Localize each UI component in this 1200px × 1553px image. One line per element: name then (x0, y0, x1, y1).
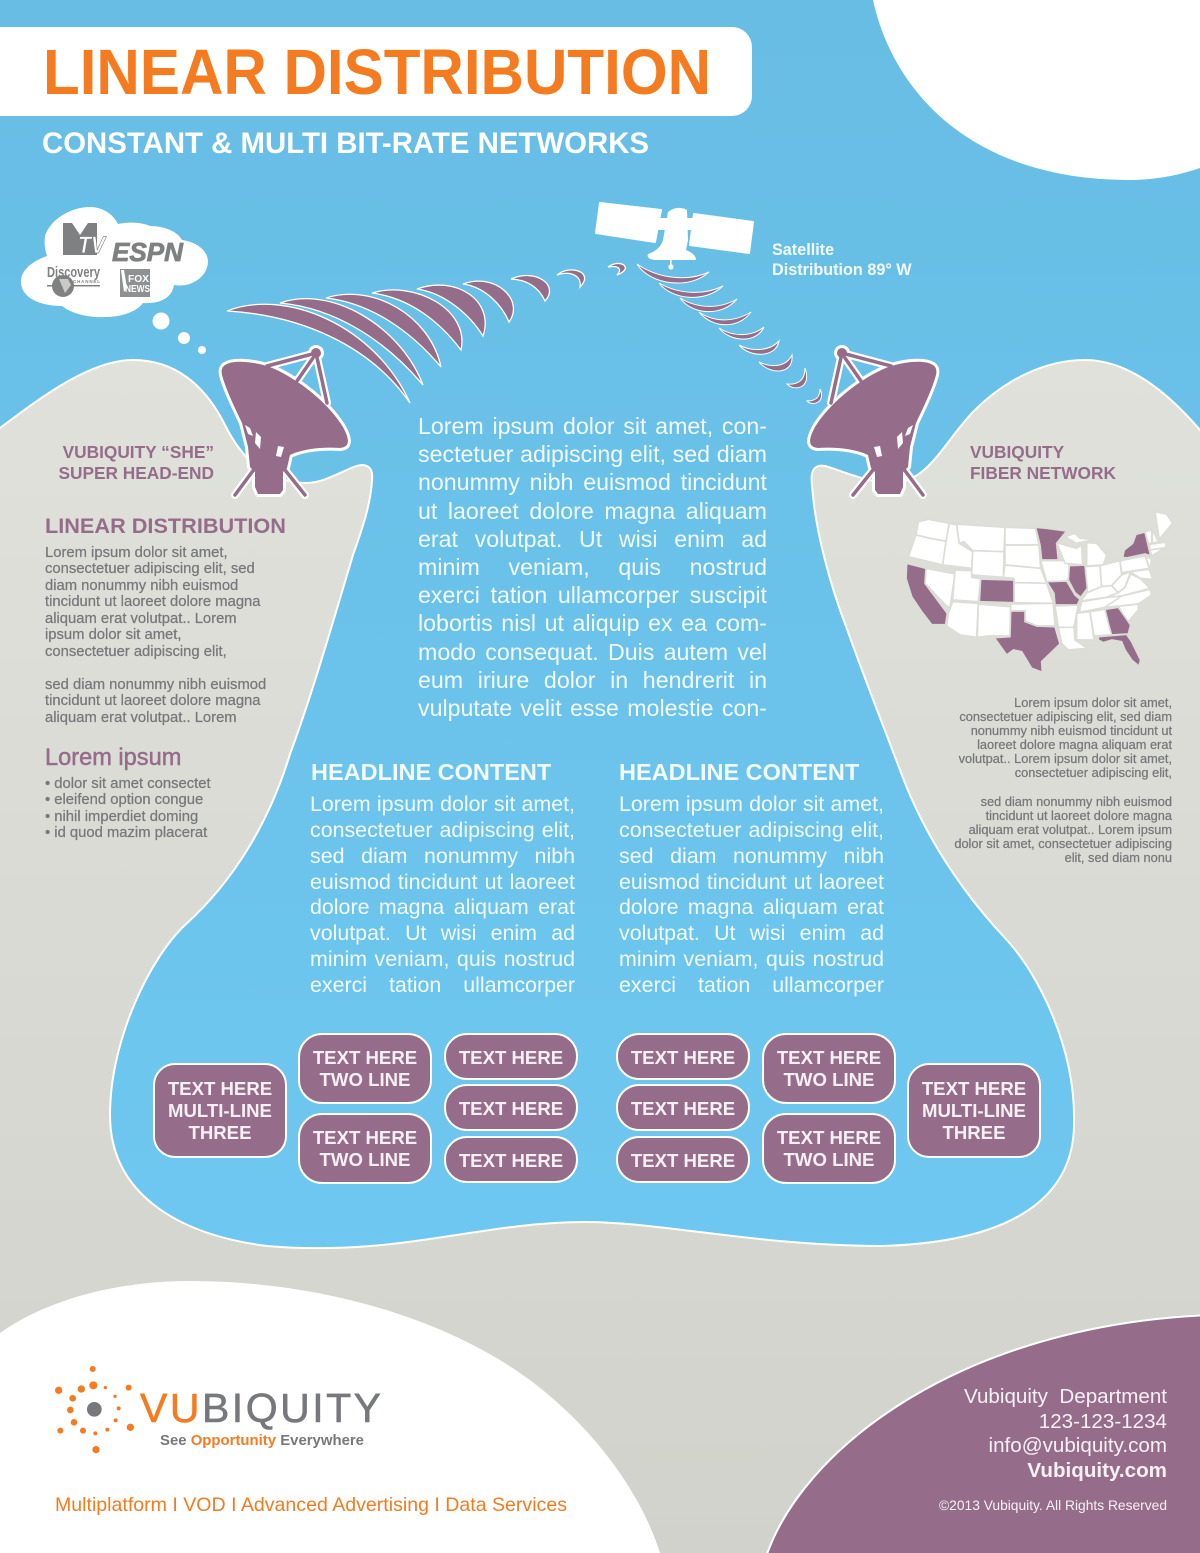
button: one line left 2: TEXT HERE (459, 1098, 563, 1118)
left column body text: aliquam erat volutpat.. Lorem (45, 611, 237, 627)
text block: column one: consectetuer adipiscing elit, (310, 818, 575, 842)
button: one line left 3: TEXT HERE (459, 1150, 563, 1170)
text block: column two: exerci tation ullamcorper (619, 973, 884, 997)
left column body text: tincidunt ut laoreet dolore magna (45, 693, 261, 709)
button: three line right (907, 1063, 1041, 1158)
label: Vubiquity fiber network: VUBIQUITY (970, 442, 1064, 462)
right column body text: nonummy nibh euismod tincidunt ut (971, 723, 1172, 738)
right column body text: elit, sed diam nonu (1065, 850, 1172, 865)
button: one line right 2 (616, 1084, 750, 1131)
left column bullet list (45, 776, 211, 841)
text block: column two: volutpat. Ut wisi enim ad (619, 921, 884, 945)
main paragraph: Lorem ipsum dolor sit amet, con- (418, 413, 767, 439)
button: two line upper right: TEXT HERE (777, 1046, 881, 1068)
button: one line left 1: TEXT HERE (459, 1046, 563, 1068)
button: two line upper right (762, 1033, 896, 1104)
button: one line right 3: TEXT HERE (631, 1150, 735, 1170)
label: satellite distribution (772, 241, 912, 279)
left column bullet list: • nihil imperdiet doming (45, 809, 198, 825)
button: one line left 3 (444, 1136, 578, 1183)
main paragraph: minim veniam, quis nostrud (418, 554, 767, 580)
main paragraph: vulputate velit esse molestie con- (418, 695, 767, 721)
logo: Discovery Channel: CHANNEL (73, 279, 100, 284)
button: two line lower right: TWO LINE (784, 1148, 874, 1170)
button: two line upper left: TWO LINE (320, 1068, 410, 1090)
footer: white logo area (0, 1281, 660, 1553)
corner shape: top right white (873, 0, 1200, 180)
signal arcs: dish up to satellite (227, 263, 625, 403)
logo: Discovery Channel (47, 264, 100, 297)
left column body text: tincidunt ut laoreet dolore magna (45, 594, 261, 610)
main paragraph (418, 413, 767, 721)
main paragraph: sectetuer adipiscing elit, sed diam (418, 441, 767, 467)
main paragraph: ut laoreet dolore magna aliquam (418, 498, 767, 524)
text block: column two: sed diam nonummy nibh (619, 844, 884, 868)
label: satellite distribution: Distribution 89° W (772, 261, 912, 279)
button: one line left 2 (444, 1084, 578, 1131)
right column body text: tincidunt ut laoreet dolore magna (986, 808, 1172, 823)
left column subheading: Lorem ipsum (45, 745, 181, 771)
text block: column one: minim veniam, quis nostrud (310, 947, 575, 971)
left column body text: aliquam erat volutpat.. Lorem (45, 710, 237, 726)
label: Vubiquity SHE: SUPER HEAD-END (58, 462, 214, 482)
logo: Fox News (120, 269, 150, 297)
button: two line upper left: TEXT HERE (313, 1046, 417, 1068)
main paragraph: exerci tation ullamcorper suscipit (418, 582, 767, 608)
text block: column two (619, 792, 884, 997)
button: two line lower left (298, 1113, 432, 1184)
button: two line lower right (762, 1113, 896, 1184)
left column bullet list: • eleifend option congue (45, 792, 203, 808)
button: two line lower left: TEXT HERE (313, 1126, 417, 1148)
headline: column one: HEADLINE CONTENT (311, 759, 551, 785)
right column body text: dolor sit amet, consectetuer adipiscing (954, 836, 1172, 851)
text block: column two: minim veniam, quis nostrud (619, 947, 884, 971)
text block: column one: exerci tation ullamcorper (310, 973, 575, 997)
icon: right satellite dish (810, 345, 936, 495)
left column body text: sed diam nonummy nibh euismod (45, 677, 266, 693)
logo: Vubiquity wordmark: VUBIQUITY (140, 1385, 381, 1431)
states not covered (908, 512, 1173, 650)
states covered (906, 527, 1151, 672)
text block: column two: consectetuer adipiscing elit, (619, 818, 884, 842)
label: Vubiquity SHE (58, 442, 214, 482)
label: Vubiquity fiber network: FIBER NETWORK (970, 462, 1116, 482)
button: three line right: THREE (942, 1122, 1006, 1142)
thought cloud with network logos (21, 207, 208, 354)
logo: MTV (63, 223, 107, 259)
text block: column one: Lorem ipsum dolor sit amet, (310, 792, 575, 816)
contact details (964, 1385, 1167, 1482)
button: two line lower right: TEXT HERE (777, 1126, 881, 1148)
text block: column two: euismod tincidunt ut laoreet (619, 870, 884, 894)
button: three line left: TEXT HERE (168, 1078, 272, 1098)
right column body text: laoreet dolore magna aliquam erat (977, 737, 1172, 752)
logo: Discovery Channel: Discovery (47, 264, 100, 281)
button: three line left (153, 1063, 287, 1158)
right column body text (954, 695, 1172, 865)
left column body text (45, 545, 266, 726)
logo: Fox News: FOX (128, 274, 149, 285)
contact details: info@vubiquity.com (988, 1434, 1167, 1457)
button: three line right: TEXT HERE (922, 1078, 1026, 1098)
left column body text: ipsum dolor sit amet, (45, 627, 182, 643)
right column body text: consectetuer adipiscing elit, (1015, 765, 1172, 780)
button: one line right 1: TEXT HERE (631, 1046, 735, 1068)
chart: US coverage map (906, 512, 1173, 672)
logo: MTV: TV (78, 232, 107, 259)
copyright: ©2013 Vubiquity. All Rights Reserved (939, 1498, 1167, 1513)
logo tagline: See Opportunity Everywhere (160, 1433, 364, 1449)
subtitle: CONSTANT & MULTI BIT-RATE NETWORKS (42, 127, 649, 160)
footer services line: Multiplatform I VOD I Advanced Advertising I Data Services (55, 1494, 567, 1516)
left column bullet list: • dolor sit amet consectet (45, 776, 211, 792)
contact details: Vubiquity.com (1027, 1459, 1167, 1482)
main paragraph: lobortis nisl ut aliquip ex ea com- (418, 610, 767, 636)
headline: column two: HEADLINE CONTENT (619, 759, 859, 785)
button: one line left 1 (444, 1033, 578, 1080)
label: Vubiquity SHE: VUBIQUITY “SHE” (63, 442, 214, 462)
left column body text: diam nonummy nibh euismod (45, 578, 238, 594)
text block: column one: dolore magna aliquam erat (310, 895, 575, 919)
text block: column one: euismod tincidunt ut laoreet (310, 870, 575, 894)
main paragraph: eum iriure dolor in hendrerit in (418, 667, 767, 693)
button: two line upper left (298, 1033, 432, 1104)
main paragraph: nonummy nibh euismod tincidunt (418, 469, 767, 495)
left column body text: consectetuer adipiscing elit, sed (45, 561, 255, 577)
label: satellite distribution: Satellite (772, 241, 834, 259)
contact details: 123-123-1234 (1039, 1410, 1167, 1433)
icon: satellite (596, 203, 753, 270)
button: three line right: MULTI-LINE (922, 1100, 1026, 1120)
button: three line left: MULTI-LINE (168, 1100, 272, 1120)
left column heading: LINEAR DISTRIBUTION (45, 513, 286, 538)
text block: column one: sed diam nonummy nibh (310, 844, 575, 868)
logo: Fox News: NEWS (125, 284, 150, 295)
text block: column one (310, 792, 575, 997)
right column body text: aliquam erat volutpat.. Lorem ipsum (969, 822, 1172, 837)
title banner: LINEAR DISTRIBUTION (43, 36, 711, 108)
left column body text: consectetuer adipiscing elit, (45, 644, 227, 660)
signal arcs: satellite down to dish (637, 264, 822, 404)
footer: purple contact area (765, 1315, 1200, 1553)
main paragraph: erat volutpat. Ut wisi enim ad (418, 526, 767, 552)
text block: column two: dolore magna aliquam erat (619, 895, 884, 919)
button: one line right 2: TEXT HERE (631, 1098, 735, 1118)
left column body text: Lorem ipsum dolor sit amet, (45, 545, 228, 561)
text block: column two: Lorem ipsum dolor sit amet, (619, 792, 884, 816)
text block: column one: volutpat. Ut wisi enim ad (310, 921, 575, 945)
contact details: Vubiquity Department (964, 1385, 1167, 1408)
grey landscape surrounding the blue content area (0, 360, 1200, 1553)
button: two line lower left: TWO LINE (320, 1148, 410, 1170)
icon: left satellite dish (222, 345, 348, 495)
right column body text: sed diam nonummy nibh euismod (981, 794, 1172, 809)
logo: ESPN: ESPN (112, 237, 184, 267)
button: one line right 1 (616, 1033, 750, 1080)
button: three line left: THREE (188, 1122, 252, 1142)
right column body text: consectetuer adipiscing elit, sed diam (959, 709, 1172, 724)
button: one line right 3 (616, 1136, 750, 1183)
right column body text: volutpat.. Lorem ipsum dolor sit amet, (959, 751, 1172, 766)
right column body text: Lorem ipsum dolor sit amet, (1014, 695, 1172, 710)
left column bullet list: • id quod mazim placerat (45, 825, 207, 841)
main paragraph: modo consequat. Duis autem vel (418, 639, 767, 665)
logo: Vubiquity starburst (55, 1366, 134, 1453)
button: two line upper right: TWO LINE (784, 1068, 874, 1090)
label: Vubiquity fiber network (970, 442, 1116, 482)
